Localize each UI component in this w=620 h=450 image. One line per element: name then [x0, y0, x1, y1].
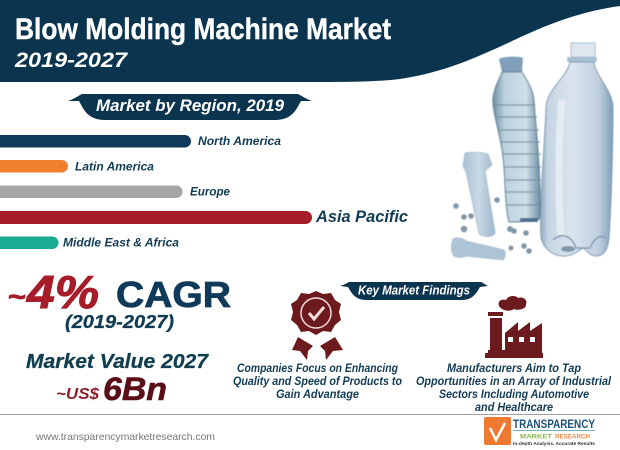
bar: Latin America: Latin America	[75, 162, 155, 174]
finding text: industrial sectors: and Healthcare	[475, 402, 554, 414]
finding text: industrial sectors: Opportunities in an Array of Industrial	[416, 376, 612, 388]
small water bottle	[493, 57, 541, 222]
bar: Europe	[0, 186, 231, 198]
finding text: industrial sectors: Sectors Including Automotive	[439, 389, 590, 401]
bar: Middle East and Africa	[0, 236, 180, 250]
bar chart: market by region	[0, 135, 409, 250]
bar: North America	[0, 135, 282, 148]
bottle preform upright	[463, 152, 495, 237]
subtitle years: 2019-2027	[14, 49, 128, 72]
ribbon heading: Market by Region, 2019	[96, 96, 285, 115]
CAGR period: (2019-2027)	[65, 312, 174, 332]
bar: Middle East and Africa: Middle East & Africa	[63, 238, 180, 250]
bar: North America: North America	[198, 136, 282, 148]
CAGR label: CAGR	[116, 274, 231, 315]
currency prefix: ~US$	[56, 386, 100, 403]
logo: Transparency Market Research: In-depth Analysis. Accurate Results	[513, 441, 595, 447]
finding text: quality and speed: Gain Advantage	[276, 389, 360, 401]
bar: Asia Pacific: Asia Pacific	[315, 207, 409, 226]
bar: Europe: Europe	[190, 186, 231, 198]
bar: Asia Pacific	[0, 207, 409, 226]
finding text: quality and speed: Companies Focus on Enhancing	[237, 363, 398, 375]
plastic pellets	[453, 197, 532, 254]
ribbon heading: Key Market Findings	[358, 284, 470, 298]
finding text: industrial sectors	[416, 363, 612, 414]
illustration: plastic bottles and preforms	[452, 43, 613, 260]
icon: factory	[485, 296, 543, 358]
finding text: industrial sectors: Manufacturers Aim to Tap	[447, 363, 581, 375]
section ribbon: key market findings	[340, 282, 488, 300]
finding text: quality and speed: Quality and Speed of Products to	[233, 376, 402, 388]
logo: Transparency Market Research	[484, 417, 595, 447]
market value callout	[26, 351, 209, 407]
finding text: quality and speed	[233, 363, 402, 401]
icon: quality medal	[291, 291, 343, 360]
market value figure: 6Bn	[103, 371, 167, 407]
market value label: Market Value 2027	[26, 351, 209, 373]
CAGR percentage: 4%	[26, 266, 99, 318]
logo: Transparency Market Research: MARKET	[520, 434, 552, 440]
website url: www.transparencymarketresearch.com	[35, 431, 215, 443]
CAGR tilde: ~	[8, 281, 26, 312]
title: Blow Molding Machine Market	[15, 13, 391, 46]
logo: Transparency Market Research: RESEARCH	[555, 434, 590, 440]
bar: Latin America	[0, 160, 155, 174]
logo: Transparency Market Research: TRANSPARENCY	[513, 417, 595, 431]
large PET bottle	[541, 43, 613, 256]
bottle preform lying	[452, 238, 505, 260]
header banner	[0, 0, 620, 82]
section ribbon: market by region	[68, 94, 312, 120]
CAGR callout	[8, 266, 231, 332]
